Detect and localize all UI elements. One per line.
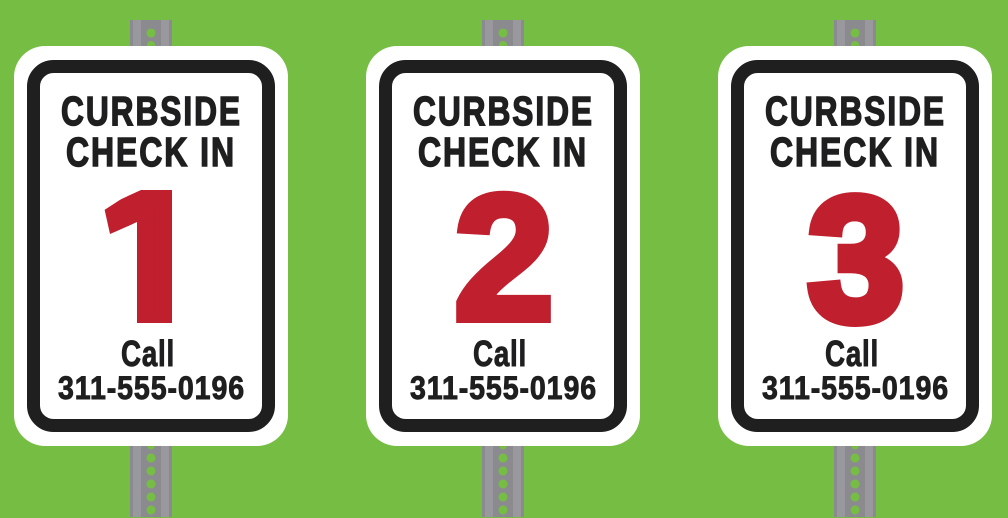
sign panel [14,46,288,446]
number 2: 2 [454,158,554,357]
heading [61,88,242,175]
heading [413,88,594,175]
call text: 311-555-0196 [410,370,597,406]
heading: CURBSIDE [765,88,946,134]
call text [762,333,949,406]
call text: Call [473,333,527,374]
post [482,20,524,517]
heading: CHECK IN [770,129,940,175]
sign 3 [718,20,992,517]
call text: 311-555-0196 [58,370,245,406]
call text: 311-555-0196 [762,370,949,406]
heading: CHECK IN [418,129,588,175]
sign 1 [14,20,288,517]
call text: Call [121,333,175,374]
number 1: 1 [101,156,204,363]
heading: CURBSIDE [413,88,594,134]
post [130,20,172,517]
number 3: 3 [808,162,904,358]
sign 2 [366,20,640,517]
heading: CURBSIDE [61,88,242,134]
post [834,20,876,517]
call text [58,333,245,406]
sign panel [366,46,640,446]
heading: CHECK IN [66,129,236,175]
heading [765,88,946,175]
sign panel [718,46,992,446]
call text: Call [825,333,879,374]
call text [410,333,597,406]
